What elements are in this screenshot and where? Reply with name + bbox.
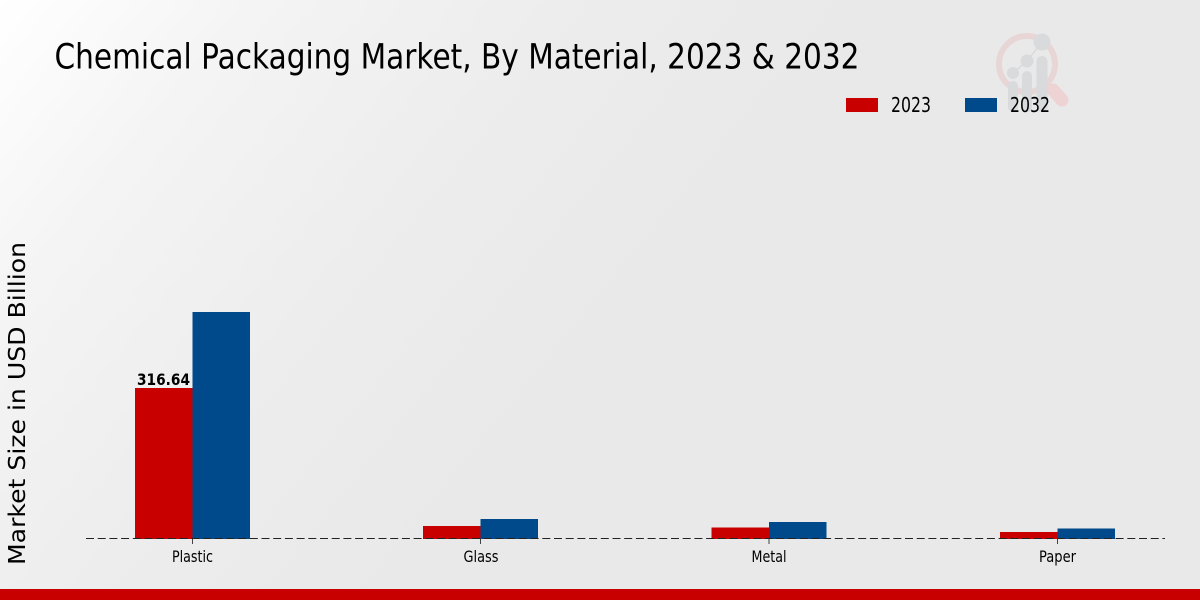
legend item: 2023: 2023 [891, 93, 931, 117]
legend [846, 93, 1050, 117]
group: Plastic: 316.64 [137, 370, 190, 389]
footer bar [0, 589, 1200, 600]
group: Plastic [135, 312, 250, 566]
group: Glass: Glass [464, 547, 498, 566]
y-axis label: Market Size in USD Billion [5, 242, 31, 565]
x-axis baseline [86, 538, 1165, 540]
group: Paper [1000, 528, 1115, 566]
group: Metal: Metal [752, 547, 786, 566]
legend item: 2032: 2032 [1010, 93, 1050, 117]
group: Plastic: Plastic [172, 547, 213, 566]
title: Chemical Packaging Market, By Material, 2023 & 2032 [54, 38, 860, 78]
legend item: 2032 [965, 93, 1050, 117]
group: Paper: Paper [1039, 547, 1076, 566]
bar chart [86, 312, 1165, 566]
logo watermark [999, 34, 1062, 112]
group: Metal [712, 522, 826, 566]
legend item: 2023 [846, 93, 931, 117]
group: Glass [423, 519, 538, 566]
